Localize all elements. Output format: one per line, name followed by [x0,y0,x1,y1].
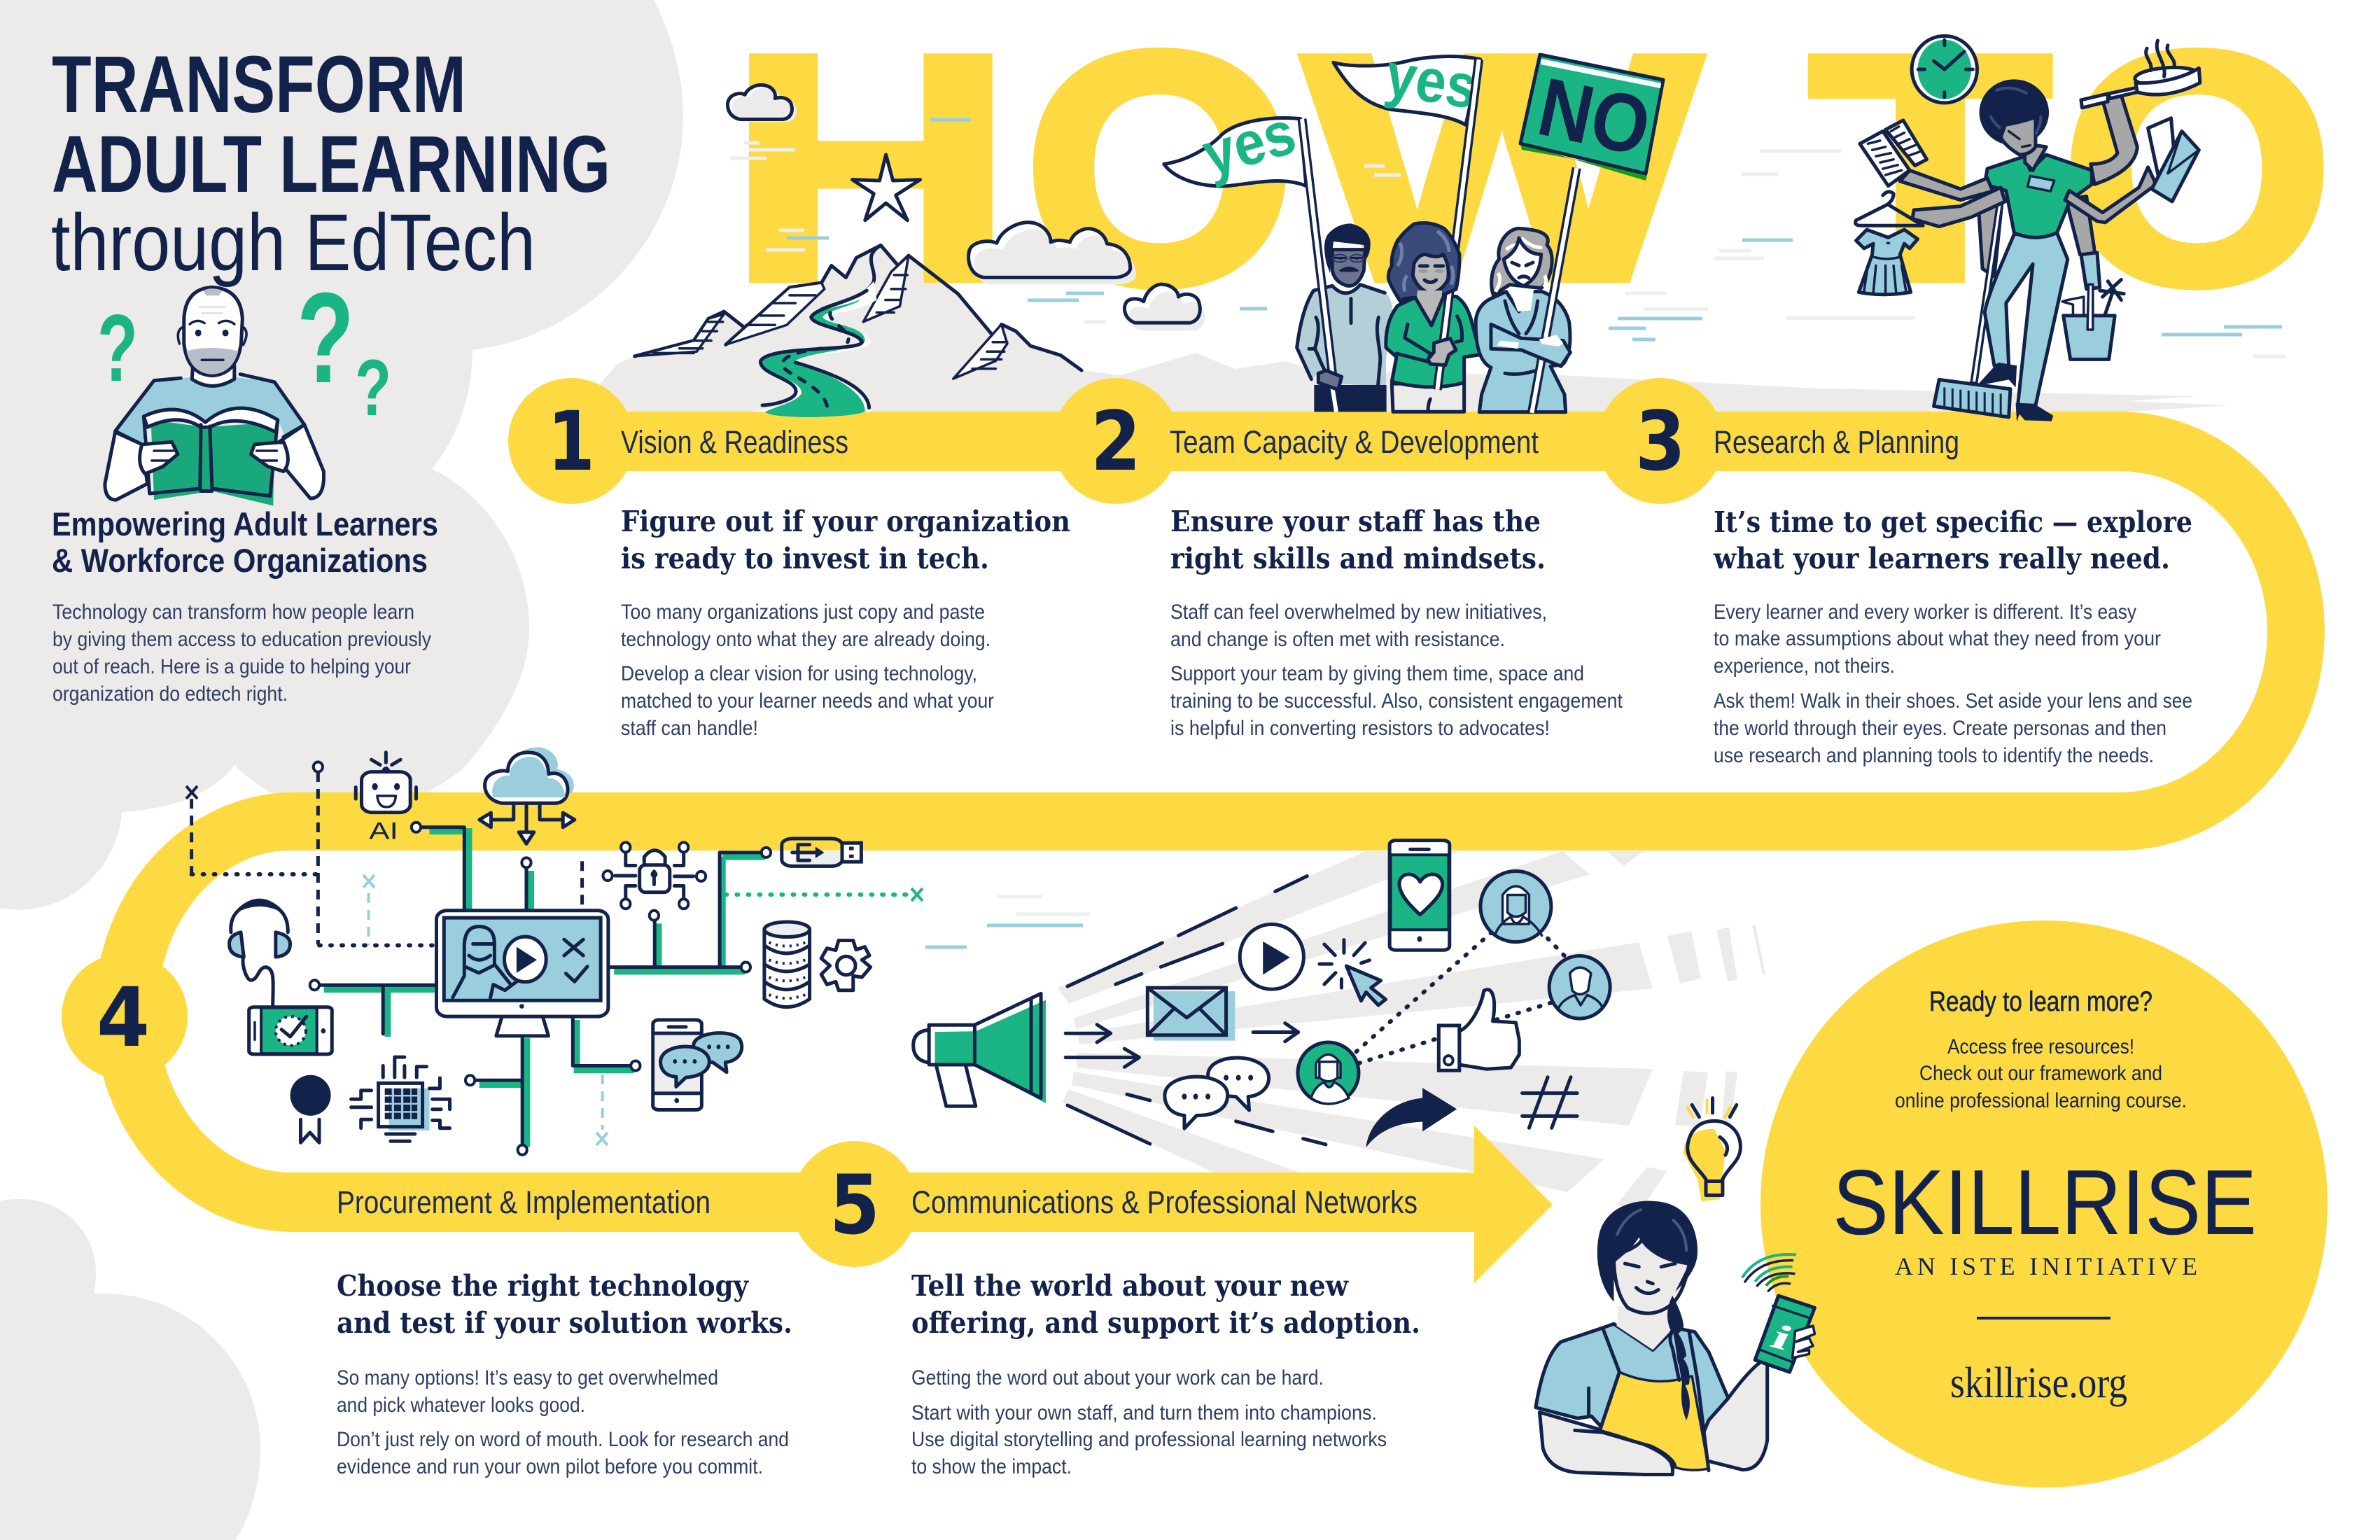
icon: phone with chat bubbles [653,1020,742,1110]
illustration: smiling woman with phone [1536,1201,1814,1474]
intro paragraph: Technology can transform how people learn [52,601,414,624]
step 3 heading: what your learners really need. [1713,542,2170,575]
network dotted connections [1356,932,1567,1063]
icon: lower small cloud [1124,284,1205,330]
step numbers: 5 [830,1157,880,1253]
SkillRise logo: SKILLRISE [1833,1151,2257,1254]
step 2 body: training to be successful. Also, consistent engagement [1170,690,1623,713]
step 5 body: Use digital storytelling and professional learning networks [911,1428,1387,1451]
intro subheading: Empowering Adult Learners [52,505,438,542]
step 4 body: So many options! It’s easy to get overwhelmed [337,1366,718,1390]
flag: yes left: yes [1195,97,1303,189]
step 4 heading: Choose the right technology [337,1269,749,1303]
intro paragraph [52,601,431,706]
sign: NO: NO [1531,60,1658,174]
step 1 heading: Figure out if your organization [621,505,1070,538]
illustration: technology network wires [192,762,910,1155]
icon: question marks: ? [355,344,391,433]
illustration: man reading a book [105,287,324,506]
icon: chat bubbles [1165,1058,1269,1128]
icon: headphones and landscape phone [229,900,332,1054]
icon: monitor with video [436,911,608,1036]
step 5 body: Getting the word out about your work can be hard. [911,1366,1324,1390]
step 2 heading: right skills and mindsets. [1170,542,1546,575]
icon: share arrow [1366,1088,1457,1147]
icon: avatar woman green [1298,1042,1359,1104]
illustration: megaphone [913,993,1046,1106]
step 4 label: Procurement & Implementation [337,1184,710,1220]
step 3 heading [1713,505,2192,575]
icon: avatar man blue [1549,956,1610,1018]
speed dashes decoration [730,120,2286,947]
illustration: smiling woman with phone: i [1765,1318,1799,1357]
arrows out of megaphone [1065,1023,1298,1067]
call to action text [1895,986,2187,1112]
icon: small cloud top [727,85,797,122]
intro subheading [52,505,438,579]
step 4 heading [337,1269,792,1340]
icon: question marks [97,265,391,433]
step 4 body: Don’t just rely on word of mouth. Look for research and [337,1428,789,1451]
call to action yellow circle [1760,920,2328,1488]
icon: thumbs up [1438,990,1519,1070]
icon: AI robot [356,752,416,844]
icon: USB stick [782,839,861,866]
SkillRise logo: AN ISTE INITIATIVE [1895,1252,2197,1280]
step 3 body: Ask them! Walk in their shoes. Set aside your lens and see [1714,690,2192,713]
step 4 body: and pick whatever looks good. [337,1394,585,1417]
icon: lightbulb [1684,1098,1740,1201]
step 5 body: to show the impact. [911,1455,1072,1478]
step 3 body [1714,601,2192,767]
step 3 body: use research and planning tools to identify the needs. [1714,744,2154,767]
step 3 body: the world through their eyes. Create personas and then [1714,717,2166,740]
step 1 body: Develop a clear vision for using technology, [621,662,977,685]
flag: yes right: yes [1381,39,1482,122]
icon: x markers on wires [186,786,608,1145]
step numbers [97,393,1686,1253]
icon: open book [1860,120,1927,186]
intro paragraph: by giving them access to education previously [52,628,431,651]
icon: cloud with arrows [479,747,575,844]
step circles on path [62,378,1723,1267]
step 4 body [337,1366,789,1478]
call to action text: Check out our framework and [1919,1062,2162,1085]
step 5 heading [911,1269,1420,1340]
step 3 body: experience, not theirs. [1714,654,1895,678]
call to action text: Ready to learn more? [1929,986,2152,1017]
title [51,40,610,288]
step 4 heading: and test if your solution works. [337,1306,792,1340]
intro paragraph: out of reach. Here is a guide to helping your [52,655,411,678]
illustration: three team members with poles [1297,59,1576,413]
broadcast rays behind communications icons [1058,851,1765,1214]
icon: cleaning bucket [2062,280,2124,359]
step 2 body: Support your team by giving them time, space and [1170,662,1584,685]
step 2 heading: Ensure your staff has the [1170,505,1541,538]
intro paragraph: organization do edtech right. [52,682,288,706]
step 1 body: staff can handle! [621,717,758,740]
step 3 heading: It’s time to get specific — explore [1714,505,2192,539]
illustration: overwhelmed multitasking worker [1900,79,2156,422]
step 1 body: Too many organizations just copy and paste [621,601,985,624]
icon: wall clock [1912,36,1977,103]
background: grey cloud upper left [0,0,683,910]
icon: papers and envelope [2148,118,2199,202]
step 1 heading [621,505,1070,575]
website link: skillrise.org [1950,1359,2127,1407]
step 1 body: technology onto what they are already doing. [621,628,990,651]
step 2 label: Team Capacity & Development [1170,424,1539,460]
green dotted wire end with x [882,888,923,901]
step 5 heading: offering, and support it’s adoption. [911,1306,1420,1340]
big HOW TO title letters [729,0,2333,352]
icon: padlock circuit [603,842,706,909]
yellow winding path band [94,412,2325,1283]
step 1 body: matched to your learner needs and what your [621,690,994,713]
title: TRANSFORM [52,40,466,130]
step 1 heading: is ready to invest in tech. [621,542,989,575]
step 2 body: and change is often met with resistance. [1170,628,1505,651]
icon: phone with heart [1390,841,1450,950]
step numbers: 1 [547,393,595,489]
icon: microchip [351,1057,450,1141]
icon: question marks: ? [97,295,138,401]
icon: envelope [1147,988,1235,1041]
icon: database and gear [764,922,871,1007]
icon: dress on hanger [1856,192,1923,295]
step 2 body: is helpful in converting resistors to advocates! [1170,717,1550,740]
broadcast dashed lines [1068,876,1326,1144]
step 2 body: Staff can feel overwhelmed by new initiatives, [1170,601,1547,624]
flag: yes right [1334,39,1482,125]
step 5 heading: Tell the world about your new [911,1269,1350,1303]
icon: avatar woman blue [1480,872,1551,942]
icon: large cloud [969,223,1136,284]
step 2 body [1170,601,1623,740]
step 3 body: Every learner and every worker is different. It’s easy [1714,601,2136,624]
step 1 label: Vision & Readiness [621,424,848,460]
step 5 body [911,1366,1387,1478]
step 2 heading [1170,505,1546,575]
icon: AI robot: AI [369,818,398,844]
step numbers: 2 [1091,393,1141,489]
call to action text: Access free resources! [1947,1035,2134,1058]
icon: play button [1240,924,1303,989]
icon: award ribbon [290,1075,331,1142]
step 3 label: Research & Planning [1714,424,1959,460]
call to action text: online professional learning course. [1895,1089,2187,1112]
intro subheading: & Workforce Organizations [52,542,428,579]
icon: hashtag [1522,1077,1577,1128]
title: through EdTech [51,198,536,288]
step 4 body: evidence and run your own pilot before you commit. [337,1455,763,1478]
icon: steaming frying pan [2081,41,2201,108]
step 1 body [621,601,994,740]
step 5 label: Communications & Professional Networks [911,1184,1418,1220]
step numbers: 4 [97,969,150,1065]
SkillRise logo [1833,1151,2257,1318]
icon: cursor click [1320,940,1386,1005]
step 5 body: Start with your own staff, and turn them into champions. [911,1401,1377,1424]
step 3 body: to make assumptions about what they need from your [1714,627,2161,650]
step numbers: 3 [1635,393,1686,489]
icon: question marks: ? [297,265,354,410]
title: ADULT LEARNING [52,120,610,209]
background: grey cloud lower left [0,1199,260,1540]
illustration: mountain with road and star [635,155,1082,417]
background: grey ground behind scenes [595,245,2230,412]
